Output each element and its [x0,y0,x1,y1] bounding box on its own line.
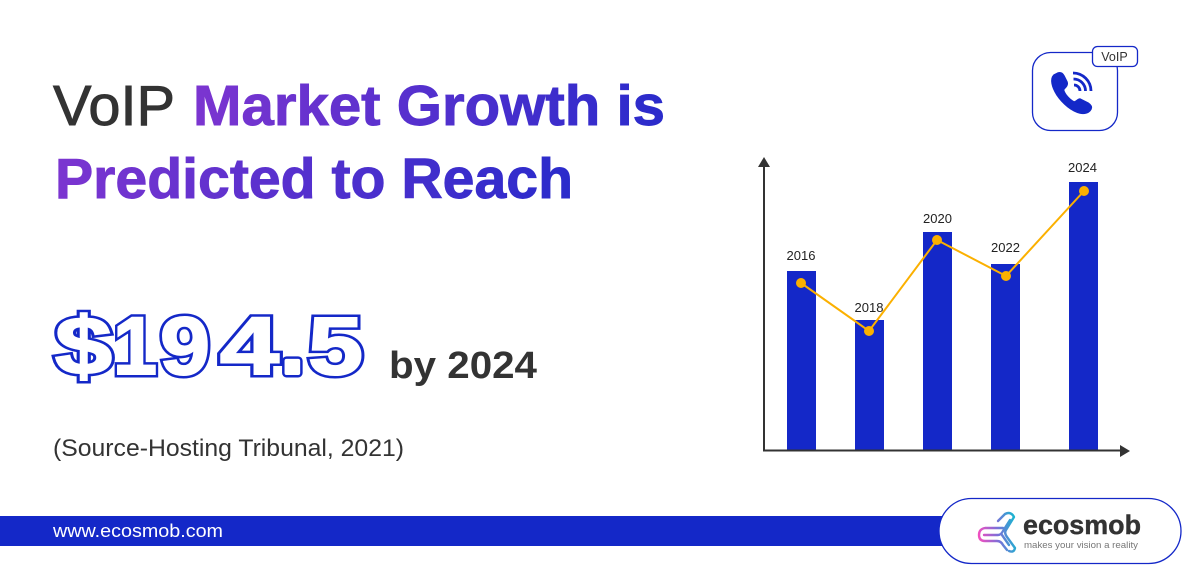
outlined market value: 4 [220,301,280,392]
phone handset [1052,73,1091,113]
outlined market value: 5 [308,301,363,392]
outlined market value: $ [55,301,112,392]
icon: VoIP phone [1032,46,1138,130]
outlined market value: 1 [113,301,157,392]
bar chart [758,157,1130,457]
year labels [787,160,1097,315]
bars [787,182,1098,450]
source text: (Source-Hosting Tribunal, 2021) [53,435,404,462]
logo tagline: makes your vision a reality [1024,540,1138,551]
year labels: 2022 [991,240,1020,255]
title: VoIP [53,74,175,138]
website url: www.ecosmob.com [52,521,223,541]
outlined market value [55,300,363,392]
by 2024 text: by 2024 [389,345,537,387]
outlined market value: . [281,300,304,391]
title: Market Growth is [193,74,665,138]
icon: ecosmob logo mark [979,513,1015,552]
title [53,74,665,211]
footer band [0,516,960,546]
title: Predicted to Reach [55,147,573,211]
axes [758,157,1130,457]
year labels: 2020 [923,211,952,226]
outlined market value: 9 [160,301,210,392]
year labels: 2018 [855,300,883,315]
outlined market value: 4 [220,301,280,392]
outlined market value: . [281,300,304,391]
outlined market value: 1 [113,301,157,392]
logo wordmark: ecosmob [1023,510,1141,540]
outlined market value: 9 [160,301,210,392]
logo pill [939,498,1181,564]
year labels: 2016 [787,248,815,263]
outlined market value: $ [55,301,112,392]
signal waves [1073,73,1091,91]
trend line [796,186,1089,336]
outlined market value: 5 [308,301,363,392]
VoIP tag: VoIP [1101,50,1128,64]
year labels: 2024 [1068,160,1097,175]
